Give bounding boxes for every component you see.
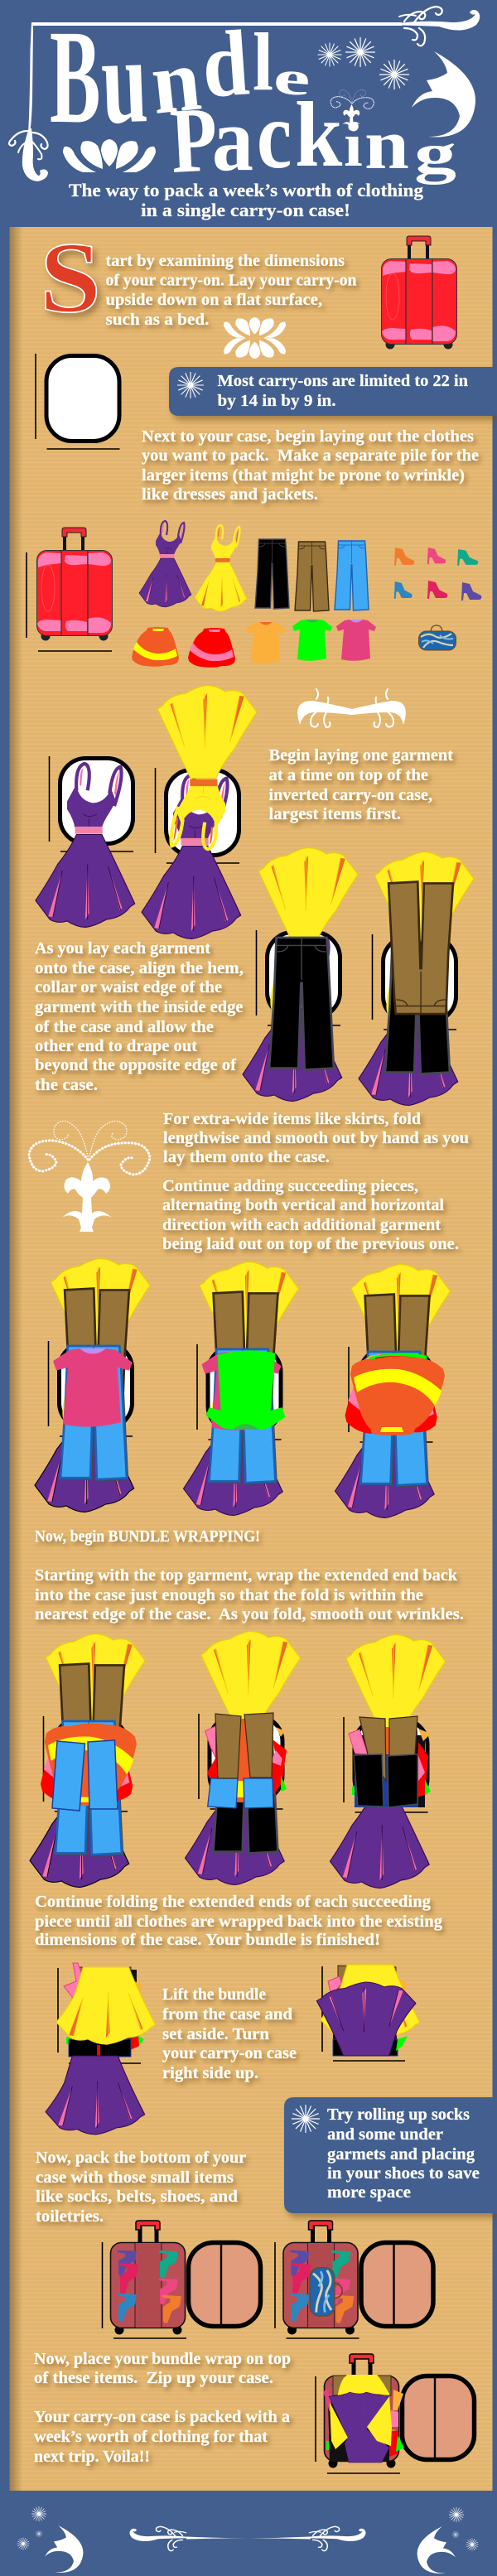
text: lift the bundle: your carry-on case	[162, 2044, 297, 2062]
title: i	[344, 111, 363, 180]
decorative crescent	[412, 51, 475, 137]
fleur-de-lis ornament	[29, 1121, 150, 1232]
red skirt	[188, 628, 235, 668]
text: continue folding: Continue folding the extended ends of each succeeding	[35, 1893, 432, 1911]
clothes laid out	[132, 521, 376, 668]
title: l	[253, 16, 273, 108]
text: voila	[34, 2408, 290, 2466]
text: begin laying: inverted carry-on case,	[268, 786, 432, 804]
step: pink shirt added	[35, 1259, 150, 1512]
footer flourish	[130, 2526, 365, 2551]
purple dress	[139, 521, 191, 607]
orange shirt	[246, 622, 286, 663]
text: voila: Your carry-on case is packed with a	[34, 2408, 290, 2426]
text: continue folding	[35, 1893, 443, 1949]
text: lay out clothes: larger items (that might be prone to wrinkle)	[142, 466, 465, 485]
text: lay out clothes: you want to pack. Make a separate pile for the	[142, 446, 479, 465]
text: wrap instructions	[35, 1566, 464, 1623]
title: g	[414, 123, 456, 185]
intro text: such as a bed.	[106, 311, 209, 329]
title: k	[295, 84, 342, 186]
text: continue adding: being laid out on top of the previous one.	[162, 1235, 459, 1253]
icon: firework	[177, 372, 204, 398]
text: continue folding: piece until all clothes are wrapped back into the existing	[35, 1913, 443, 1931]
text: lift the bundle: Lift the bundle	[162, 1985, 266, 2004]
step: yellow dress folded, purple draped	[46, 1963, 156, 2135]
text: pack the bottom: toiletries.	[36, 2207, 104, 2226]
title: a	[212, 89, 253, 190]
open case with shoes	[103, 2221, 260, 2338]
text: lift the bundle: from the case and	[162, 2005, 293, 2024]
text: extra wide items: lay them onto the case.	[163, 1148, 330, 1166]
intro text: tart by examining the dimensions	[106, 252, 345, 270]
callout text	[327, 2106, 480, 2202]
text: extra wide items: For extra-wide items like skirts, fold	[163, 1110, 422, 1128]
text: voila: week’s worth of clothing for that	[34, 2428, 268, 2446]
small bag	[419, 625, 456, 650]
callout text: by 14 in by 9 in.	[217, 392, 336, 410]
text: align garment: of the case and allow the	[35, 1018, 214, 1036]
text: wrap instructions: Starting with the top garment, wrap the extended end back	[35, 1566, 458, 1585]
step: green shirt added	[184, 1262, 298, 1516]
shoes	[394, 548, 481, 601]
text: align garment: onto the case, align the hem,	[35, 959, 244, 977]
icon: firework cluster	[318, 37, 409, 89]
text: continue adding	[162, 1177, 459, 1253]
title: P	[168, 89, 220, 193]
step: purple dress on case	[36, 756, 135, 928]
intro text	[106, 252, 357, 329]
yellow dress	[195, 525, 247, 611]
text: pack the bottom: Now, pack the bottom of your	[36, 2149, 246, 2167]
blue jeans	[335, 541, 369, 610]
text: begin laying: largest items first.	[268, 805, 401, 823]
text: bundle wrapping heading: Now, begin BUNDLE WRAPPING!	[35, 1527, 260, 1546]
brown pants	[295, 542, 329, 611]
step: jeans folded back	[30, 1633, 145, 1887]
callout: size limits	[169, 367, 497, 416]
suitcase with guides	[27, 528, 113, 651]
text: begin laying: Begin laying one garment	[268, 746, 453, 765]
icon: firework	[292, 2105, 320, 2133]
text: align garment: other end to drape out	[35, 1037, 197, 1055]
text: place bundle	[34, 2350, 291, 2387]
text: align garment: garment with the inside edge	[35, 998, 244, 1016]
callout: socks tip	[284, 2097, 497, 2213]
callout text	[217, 372, 469, 410]
text: align garment: As you lay each garment	[35, 939, 210, 958]
intro text: of your carry-on. Lay your carry-on	[106, 272, 357, 290]
callout text: more space	[327, 2183, 411, 2202]
flower ornament	[224, 317, 286, 359]
text: extra wide items: lengthwise and smooth out by hand as you	[163, 1129, 469, 1147]
text: wrap instructions: nearest edge of the case. As you fold, smooth out wrinkles.	[35, 1605, 464, 1623]
text: place bundle: Now, place your bundle wrap on top	[34, 2350, 291, 2368]
text: begin laying: at a time on top of the	[268, 766, 428, 784]
title ornament frame	[9, 7, 480, 181]
subtitle: The way to pack a week’s worth of clothing	[69, 180, 423, 200]
text: continue adding: direction with each additional garment	[162, 1216, 441, 1234]
text: extra wide items	[163, 1110, 469, 1166]
tulip ornament	[63, 139, 156, 172]
wing ornament	[297, 689, 406, 727]
callout text: garmets and placing	[327, 2145, 475, 2164]
text: wrap instructions: into the case just enough so that the fold is within the	[35, 1586, 423, 1604]
open case with shoes and bag	[275, 2221, 433, 2338]
step: brown pants added	[359, 851, 474, 1105]
text: lift the bundle: right side up.	[162, 2064, 258, 2082]
text: pack the bottom: like socks, belts, shoes, and	[36, 2188, 239, 2206]
text: align garment: the case.	[35, 1076, 98, 1094]
open case with bundle packed	[316, 2354, 474, 2473]
text: continue adding: Continue adding succeeding pieces,	[162, 1177, 418, 1195]
title: n	[364, 104, 409, 184]
callout text: Most carry-ons are limited to 22 in	[217, 372, 469, 390]
title: d	[199, 12, 252, 118]
step: black jeans added	[243, 848, 358, 1102]
footer ornaments	[17, 2506, 479, 2574]
green shirt	[292, 620, 332, 661]
icon: red suitcase	[381, 236, 457, 350]
title: n	[147, 30, 205, 133]
step: black jeans folded back	[330, 1635, 446, 1889]
subtitle: in a single carry-on case!	[141, 200, 350, 220]
text: lift the bundle	[162, 1985, 297, 2082]
text: lay out clothes: like dresses and jackets.	[142, 485, 318, 504]
pink shirt	[336, 620, 376, 661]
title	[50, 3, 456, 193]
text: continue adding: alternating both vertical and horizontal	[162, 1196, 444, 1214]
step: skirts added	[335, 1264, 451, 1517]
subtitle	[69, 180, 423, 220]
header fleur ornament	[331, 89, 374, 129]
text: pack the bottom: case with those small items	[36, 2168, 234, 2187]
open case diagram	[36, 354, 119, 449]
text: voila: next trip. Voila!!	[34, 2448, 150, 2466]
text: lift the bundle: set aside. Turn	[162, 2025, 270, 2043]
black jeans	[255, 539, 289, 609]
callout text: in your shoes to save	[327, 2164, 480, 2183]
step: brown pants folded back	[186, 1632, 300, 1885]
callout text: Try rolling up socks	[327, 2106, 470, 2124]
drop cap S: S	[40, 222, 101, 334]
text: align garment: collar or waist edge of the	[35, 978, 222, 996]
text: continue folding: dimensions of the case. Your bundle is finished!	[35, 1931, 380, 1949]
title: u	[99, 12, 150, 150]
orange skirt	[132, 627, 179, 667]
title: e	[272, 50, 312, 106]
step: finished bundle	[316, 1965, 420, 2061]
text: align garment	[35, 939, 244, 1094]
step: yellow dress added	[142, 686, 257, 939]
title: B	[50, 3, 100, 152]
title: c	[257, 82, 292, 189]
intro text: upside down on a flat surface,	[106, 291, 322, 309]
text: begin laying	[268, 746, 453, 823]
text: pack the bottom	[36, 2149, 246, 2226]
callout text: and some under	[327, 2125, 443, 2144]
text: align garment: beyond the opposite edge of	[35, 1056, 237, 1074]
text: place bundle: of these items. Zip up your case.	[34, 2369, 273, 2387]
text: lay out clothes	[142, 427, 479, 504]
text: lay out clothes: Next to your case, begin laying out the clothes	[142, 427, 474, 446]
